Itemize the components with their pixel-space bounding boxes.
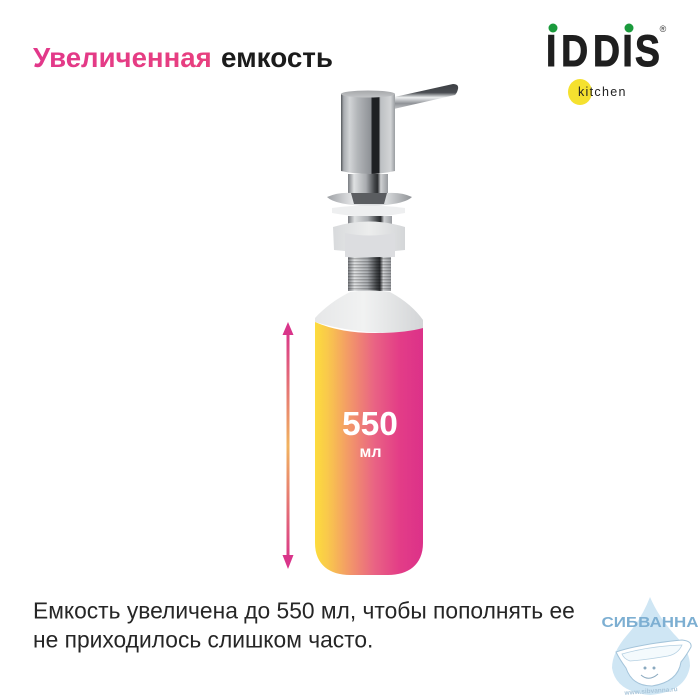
description text: не приходилось слишком часто. — [33, 626, 373, 652]
pump body — [341, 91, 395, 174]
logo green dots — [548, 24, 634, 32]
description text: Емкость увеличена до 550 мл, чтобы пополнять ее — [33, 598, 575, 624]
logo: IDDIS kitchen — [546, 24, 667, 105]
logo kitchen label: kitchen — [578, 85, 627, 99]
bottle liquid — [315, 322, 423, 575]
watermark drop — [612, 597, 690, 695]
capacity unit: мл — [360, 444, 382, 461]
watermark tub rim — [622, 645, 682, 661]
white washer — [332, 206, 405, 216]
height arrow — [282, 322, 294, 569]
upper thread — [348, 216, 392, 226]
spout — [381, 84, 458, 111]
title: Увеличенная — [33, 42, 212, 73]
watermark face — [641, 667, 658, 678]
bottle shoulder — [315, 290, 423, 333]
capacity number: 550 — [342, 406, 398, 443]
watermark url: www.sibvanna.ru — [623, 686, 678, 697]
dispenser pump — [327, 84, 458, 291]
neck — [348, 174, 388, 198]
bottle — [315, 290, 423, 575]
logo yellow blob — [568, 79, 592, 105]
threaded stem — [348, 257, 391, 291]
flange — [327, 193, 412, 206]
logo wordmark: IDDIS — [546, 26, 660, 76]
watermark name: СИБВАННА — [602, 615, 699, 631]
watermark tub — [616, 640, 691, 686]
plastic nut — [333, 222, 405, 257]
watermark: Sibvanna — [602, 597, 699, 697]
pump cap — [341, 90, 395, 98]
logo registered mark: ® — [660, 24, 667, 34]
title: емкость — [221, 42, 333, 73]
